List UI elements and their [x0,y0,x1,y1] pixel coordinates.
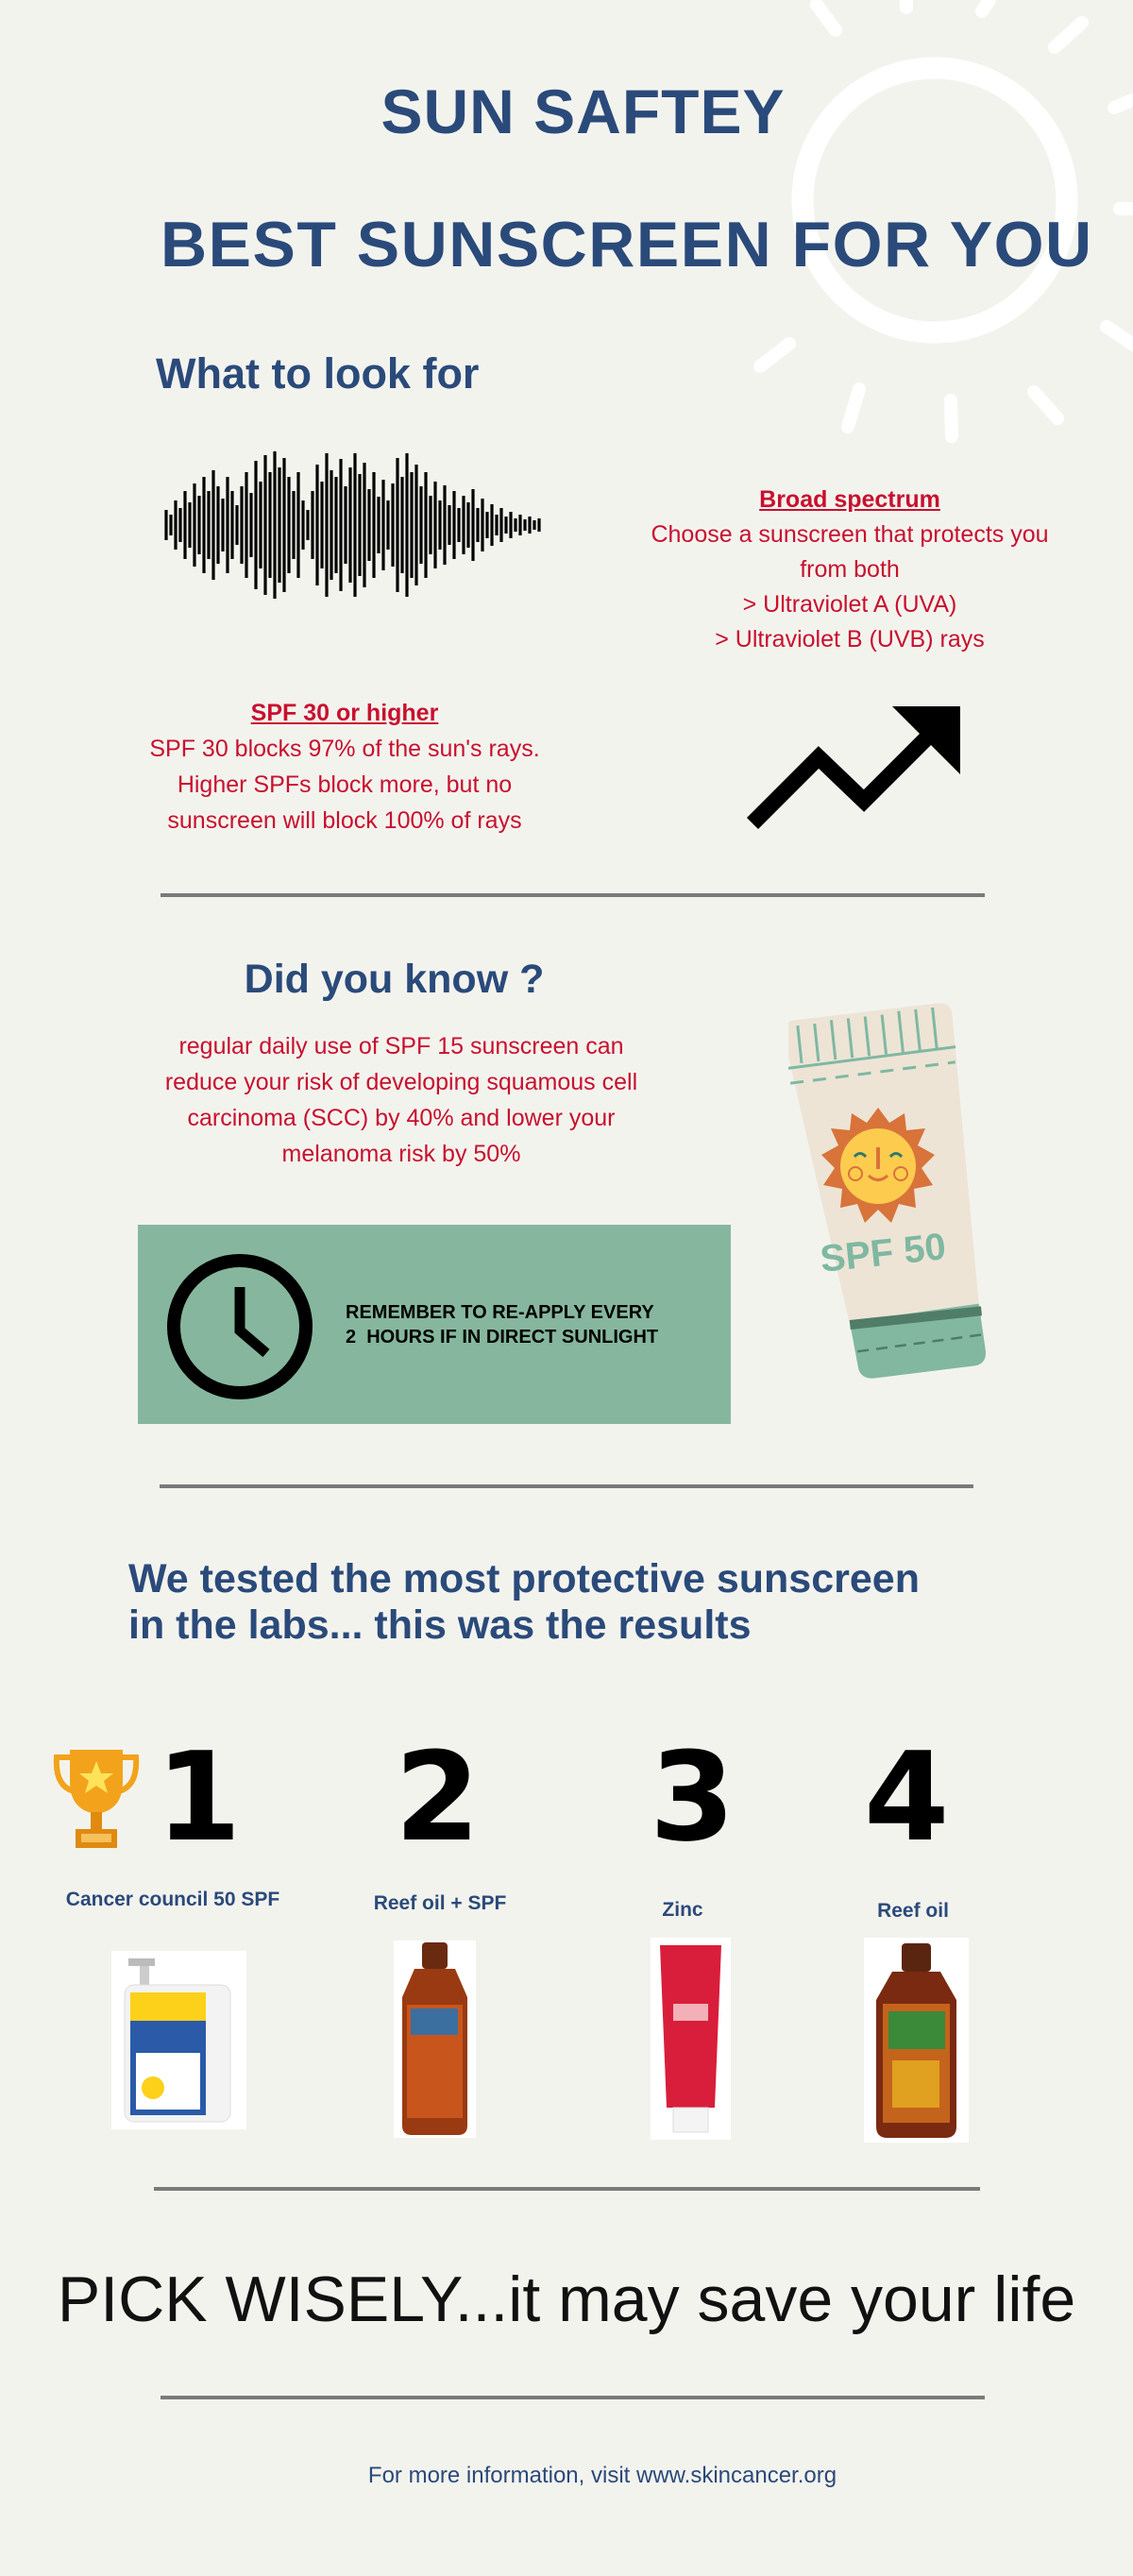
illustration: sunscreen tube SPF 50: SPF 50 [819,1226,948,1280]
text block: did you know fact: carcinoma (SCC) by 40% and lower your [188,1105,615,1131]
icon: trending arrow [747,706,960,829]
product 4: reef oil [864,1938,969,2143]
footer: For more information, visit www.skincancer.org [368,2463,837,2488]
text block: SPF 30: sunscreen will block 100% of rays [167,807,522,834]
text block: broad spectrum: Choose a sunscreen that protects you [651,521,1049,548]
rank 2: 2 [395,1725,480,1869]
text block: SPF 30 [149,700,540,834]
decorative sun outline [753,0,1133,443]
label 1: Cancer council 50 SPF [66,1889,279,1910]
rank 1: 1 [156,1725,241,1869]
heading: what to look for: What to look for [156,349,479,398]
rank 4: 4 [864,1725,949,1869]
text block: did you know fact: melanoma risk by 50% [282,1141,520,1167]
closing message: PICK WISELY...it may save your life [58,2263,1075,2335]
callout: reapply reminder [138,1225,731,1424]
icon: trophy [53,1750,140,1848]
label 4: Reef oil [877,1900,949,1922]
text block: did you know fact: reduce your risk of developing squamous cell [165,1069,637,1095]
heading: lab results: We tested the most protective sunscreen [128,1556,920,1602]
text block: SPF 30: Higher SPFs block more, but no [178,771,512,798]
text block: SPF 30: SPF 30 blocks 97% of the sun's rays. [149,736,540,762]
rank 3: 3 [650,1725,735,1869]
reminder text: REMEMBER TO RE-APPLY EVERY 2 HOURS IF IN DIRECT SUNLIGHT [346,1302,658,1347]
icon: sound waveform [164,451,541,599]
text block: did you know fact: regular daily use of SPF 15 sunscreen can [178,1033,624,1059]
text block: SPF 30: SPF 30 or higher [251,700,438,726]
product 2: reef oil + spf [394,1940,476,2138]
subtitle: BEST SUNSCREEN FOR YOU [161,209,1093,280]
label 3: Zinc [662,1899,703,1921]
text block: broad spectrum [651,486,1049,652]
product 1: cancer council bottle [111,1951,246,2129]
text block: broad spectrum: > Ultraviolet A (UVA) [743,591,956,618]
text block: broad spectrum: > Ultraviolet B (UVB) rays [715,626,985,652]
heading: did you know: Did you know ? [245,957,544,1002]
illustration: sunscreen tube SPF 50 [788,1003,986,1379]
heading: lab results [128,1556,920,1648]
icon: clock [167,1254,313,1399]
title: SUN SAFTEY [380,76,786,146]
text block: broad spectrum: from both [800,556,900,583]
text block: broad spectrum: Broad spectrum [759,486,940,513]
heading: lab results: in the labs... this was the results [128,1602,752,1648]
label 2: Reef oil + SPF [374,1892,506,1914]
product 3: zinc tube [651,1938,731,2140]
text block: did you know fact [165,1033,637,1167]
